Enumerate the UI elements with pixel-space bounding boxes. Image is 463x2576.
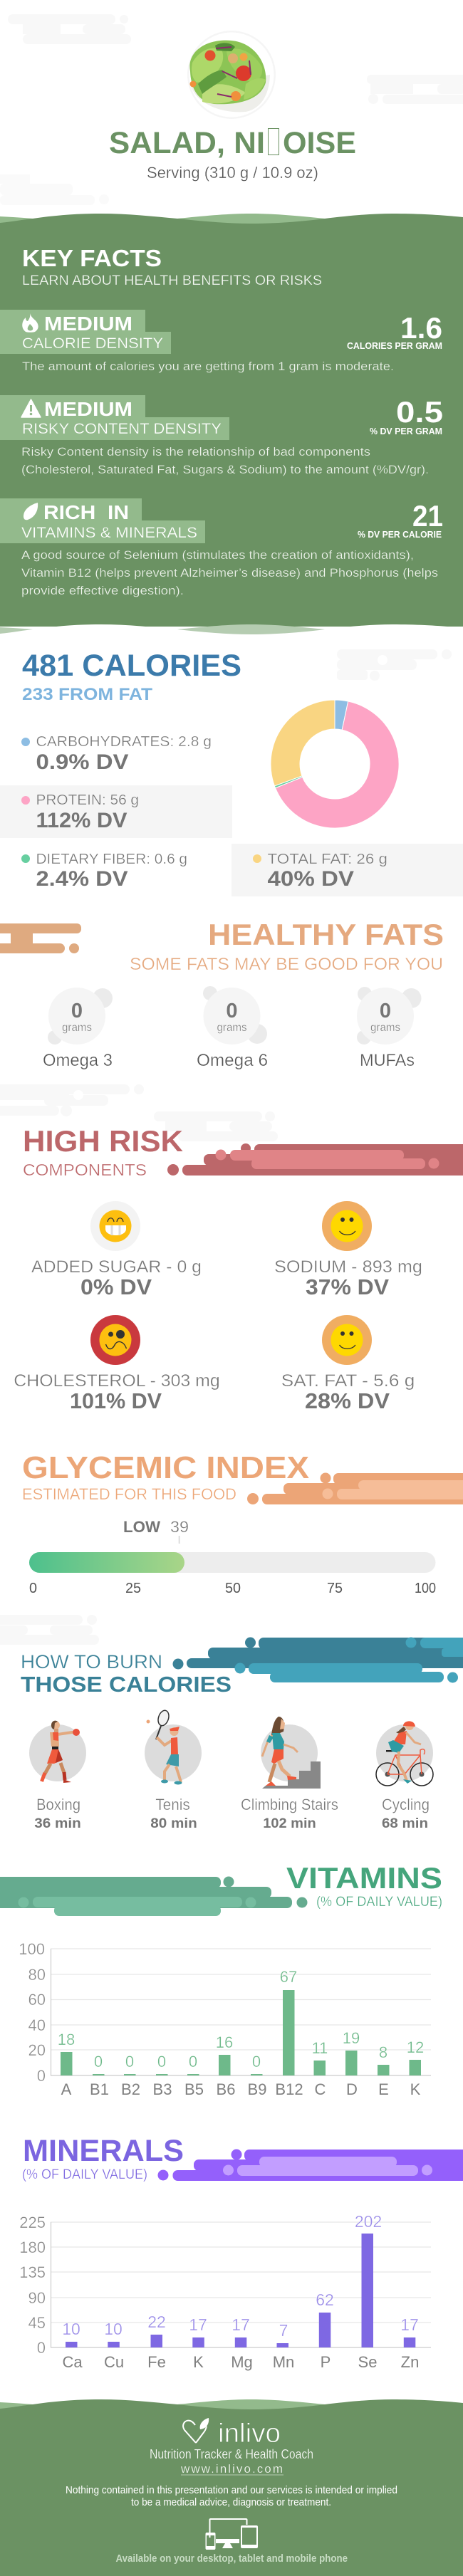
icon: flame bbox=[22, 313, 38, 333]
gauge scale: 0 bbox=[29, 1581, 37, 1596]
gauge value: LOW bbox=[123, 1518, 160, 1536]
panel: key facts bbox=[0, 214, 463, 641]
stat: protein: 112% DV bbox=[36, 809, 127, 832]
item: cholesterol: CHOLESTEROL - 303 mg bbox=[14, 1371, 220, 1391]
bar chart: vitamins: 12 bbox=[407, 2038, 424, 2056]
top wave bbox=[0, 214, 463, 627]
heading: MINERALS bbox=[23, 2134, 184, 2168]
stat: protein bbox=[0, 785, 232, 838]
heading: 233 FROM FAT bbox=[22, 685, 152, 704]
heading bbox=[22, 649, 241, 704]
bar chart: vitamins: 60 bbox=[28, 1991, 46, 2009]
background clouds bbox=[0, 1084, 278, 1141]
background cloud bbox=[337, 649, 452, 681]
bar chart: vitamins: B12 bbox=[275, 2080, 303, 2098]
panel: vitamins bbox=[0, 1861, 442, 2098]
fact: rich in vitamins and minerals: VITAMINS & MINERALS bbox=[21, 525, 197, 541]
fat: omega 6: Omega 6 bbox=[197, 1051, 268, 1070]
bar chart: vitamins: 100 bbox=[19, 1940, 45, 1958]
logo: inlivo bbox=[218, 2419, 281, 2449]
background clouds bbox=[0, 14, 463, 205]
fat: omega 3 bbox=[43, 988, 113, 1070]
heading: 481 CALORIES bbox=[22, 649, 241, 683]
stat: dietary fiber: 2.4% DV bbox=[36, 867, 128, 891]
bar chart: vitamins: B9 bbox=[248, 2080, 266, 2098]
decoration bbox=[247, 1472, 463, 1504]
disclaimer: Nothing contained in this presentation and our services is intended or implied bbox=[66, 2485, 397, 2496]
bar chart: minerals: 10 bbox=[62, 2320, 80, 2338]
item: added sugar bbox=[31, 1201, 202, 1299]
bar chart: minerals: 7 bbox=[279, 2321, 288, 2340]
bar chart: minerals: 17 bbox=[400, 2315, 419, 2334]
fat: omega 6: 0 bbox=[226, 1000, 238, 1022]
fact: rich in vitamins and minerals: 21 bbox=[412, 499, 443, 533]
title: SALAD, NI bbox=[109, 126, 265, 160]
gauge scale: 75 bbox=[327, 1581, 343, 1596]
heading: ESTIMATED FOR THIS FOOD bbox=[22, 1485, 236, 1503]
bar chart: vitamins: 0 bbox=[157, 2053, 166, 2070]
fact: calorie density: CALORIES PER GRAM bbox=[347, 341, 442, 351]
activity: cycling bbox=[376, 1721, 433, 1831]
bar chart: vitamins: 8 bbox=[379, 2043, 387, 2061]
bar chart: vitamins: 0 bbox=[252, 2053, 261, 2070]
item: sodium: 37% DV bbox=[306, 1274, 389, 1299]
bar chart: vitamins: B2 bbox=[121, 2080, 140, 2098]
bar chart: vitamins: B1 bbox=[90, 2080, 109, 2098]
fat: omega 3: 0 bbox=[71, 1000, 83, 1022]
icon: leaf bbox=[24, 503, 38, 520]
gauge value: 39 bbox=[170, 1518, 189, 1536]
heading: (% OF DAILY VALUE) bbox=[316, 1895, 442, 1910]
decoration bbox=[167, 1143, 463, 1176]
fact: risky content density: Risky Content density is the relationship of bad components bbox=[21, 445, 370, 459]
fact: calorie density: MEDIUM bbox=[44, 313, 132, 335]
bar chart: vitamins: 80 bbox=[28, 1966, 46, 1984]
gauge scale: 50 bbox=[225, 1581, 241, 1596]
bar chart: vitamins: 16 bbox=[216, 2033, 233, 2051]
activity: climbing stairs: 102 min bbox=[263, 1816, 316, 1831]
fact: risky content density: 0.5 bbox=[396, 395, 443, 429]
fat: MUFAs: grams bbox=[370, 1022, 400, 1034]
item: saturated fat bbox=[281, 1315, 415, 1413]
activity: boxing bbox=[29, 1721, 86, 1831]
decoration bbox=[0, 923, 81, 953]
panel: footer bbox=[0, 2399, 463, 2576]
disclaimer bbox=[66, 2485, 397, 2508]
stat: total fat: 40% DV bbox=[268, 867, 354, 891]
fact: calorie density: 1.6 bbox=[400, 311, 442, 345]
item: cholesterol: 101% DV bbox=[70, 1388, 162, 1413]
bar chart: vitamins: 18 bbox=[58, 2031, 75, 2048]
heading: SOME FATS MAY BE GOOD FOR YOU bbox=[130, 955, 443, 974]
activity: boxing: Boxing bbox=[36, 1796, 80, 1813]
heading: KEY FACTS bbox=[22, 245, 162, 271]
fact: calorie density: CALORIE DENSITY bbox=[22, 335, 163, 352]
gauge scale: 100 bbox=[415, 1581, 436, 1596]
panel: minerals bbox=[19, 2134, 463, 2371]
bar chart: vitamins: 67 bbox=[280, 1968, 297, 1986]
bar chart: vitamins: B6 bbox=[217, 2080, 235, 2098]
fat: omega 6 bbox=[197, 986, 268, 1070]
bar chart: minerals bbox=[19, 2212, 431, 2371]
icon: tennis player bbox=[147, 1709, 182, 1784]
bar chart: minerals: 180 bbox=[19, 2239, 46, 2256]
heading: LEARN ABOUT HEALTH BENEFITS OR RISKS bbox=[22, 273, 322, 288]
item: cholesterol bbox=[14, 1315, 220, 1413]
heading: THOSE CALORIES bbox=[21, 1672, 232, 1697]
panel: healthy fats bbox=[0, 918, 444, 1070]
bar chart: minerals: Fe bbox=[147, 2353, 166, 2371]
fact: rich in vitamins and minerals: RICH IN bbox=[43, 501, 129, 523]
heading: VITAMINS bbox=[286, 1861, 442, 1895]
bar chart: vitamins bbox=[19, 1940, 431, 2098]
item: added sugar: 0% DV bbox=[80, 1274, 152, 1299]
heading bbox=[130, 918, 444, 974]
decoration bbox=[172, 1638, 463, 1683]
bar chart: minerals: P bbox=[321, 2353, 331, 2371]
icon: salad bowl bbox=[187, 31, 276, 119]
disclaimer: to be a medical advice, diagnosis or treatment. bbox=[131, 2497, 331, 2508]
bar chart: minerals: 45 bbox=[28, 2314, 46, 2332]
bar chart: minerals: Cu bbox=[104, 2353, 124, 2371]
bar chart: minerals: 17 bbox=[189, 2315, 207, 2334]
item: saturated fat: 28% DV bbox=[305, 1388, 390, 1413]
bar chart: minerals: 17 bbox=[232, 2315, 250, 2334]
bar chart: vitamins: B3 bbox=[153, 2080, 172, 2098]
heading: HOW TO BURN bbox=[21, 1651, 162, 1672]
stat: carbohydrates: CARBOHYDRATES: 2.8 g bbox=[36, 734, 212, 750]
panel: calories bbox=[0, 649, 463, 896]
bar chart: vitamins: 0 bbox=[189, 2053, 197, 2070]
bar chart: minerals: K bbox=[193, 2353, 204, 2371]
bar chart: vitamins: 40 bbox=[28, 2016, 46, 2034]
activity: climbing stairs bbox=[241, 1717, 338, 1831]
bar chart: minerals: Zn bbox=[401, 2353, 419, 2371]
stat: carbohydrates: 0.9% DV bbox=[36, 750, 128, 774]
footer wave bbox=[0, 2399, 463, 2576]
fat: omega 6: grams bbox=[217, 1022, 246, 1034]
donut chart bbox=[271, 700, 399, 828]
tagline: Nutrition Tracker & Health Coach bbox=[150, 2447, 313, 2461]
heading bbox=[21, 1651, 232, 1697]
fact: rich in vitamins and minerals: A good source of Selenium (stimulates the creation of antioxidants), bbox=[21, 548, 414, 562]
item: sodium: SODIUM - 893 mg bbox=[274, 1257, 422, 1277]
fact: rich in vitamins and minerals: provide effective digestion). bbox=[21, 584, 184, 597]
bar chart: vitamins: A bbox=[61, 2080, 72, 2098]
fact: risky content density: % DV PER GRAM bbox=[370, 426, 442, 436]
gauge scale: 25 bbox=[125, 1581, 141, 1596]
bar chart: minerals: 10 bbox=[104, 2320, 123, 2338]
bar chart: minerals: Se bbox=[358, 2353, 377, 2371]
bar chart: vitamins: 19 bbox=[343, 2029, 360, 2047]
stat: total fat: TOTAL FAT: 26 g bbox=[268, 852, 387, 867]
gauge scale bbox=[29, 1581, 436, 1596]
icon: boxer bbox=[41, 1721, 80, 1783]
fat: omega 3: grams bbox=[62, 1022, 92, 1034]
bar chart: minerals: 135 bbox=[19, 2263, 46, 2281]
heading bbox=[22, 2134, 184, 2182]
stat: protein: PROTEIN: 56 g bbox=[36, 792, 139, 808]
bottom wave bbox=[0, 624, 463, 641]
fat: MUFAs bbox=[357, 987, 422, 1070]
heading: HIGH RISK bbox=[23, 1124, 183, 1158]
bar chart: minerals: 90 bbox=[28, 2289, 46, 2307]
stat: total fat bbox=[232, 844, 463, 896]
heading: HEALTHY FATS bbox=[208, 918, 444, 951]
heading: (% OF DAILY VALUE) bbox=[22, 2167, 147, 2182]
bar chart: vitamins: E bbox=[378, 2080, 389, 2098]
bar chart: minerals: 22 bbox=[147, 2313, 166, 2331]
icon: devices bbox=[205, 2518, 258, 2550]
icon: stairs climber bbox=[262, 1717, 321, 1789]
panel: burn calories bbox=[0, 1615, 463, 1831]
heading bbox=[22, 245, 322, 288]
decoration bbox=[0, 1877, 308, 1916]
bar chart: vitamins: C bbox=[315, 2080, 326, 2098]
bar chart: minerals: Ca bbox=[62, 2353, 83, 2371]
icon: warning triangle bbox=[21, 399, 41, 417]
panel: high risk bbox=[0, 1084, 463, 1413]
heading: COMPONENTS bbox=[23, 1161, 147, 1179]
heading bbox=[286, 1861, 442, 1910]
logo bbox=[183, 2418, 281, 2449]
fact: rich in vitamins and minerals: % DV PER CALORIE bbox=[358, 530, 442, 540]
icon: smiling face bbox=[331, 1324, 363, 1356]
gauge bar bbox=[29, 1552, 436, 1573]
icon: grinning face bbox=[100, 1210, 131, 1242]
bar chart: vitamins: 11 bbox=[312, 2039, 328, 2057]
fact: risky content density: (Cholesterol, Saturated Fat, Sugars & Sodium) to the amount (%DV/gr). bbox=[21, 463, 429, 476]
activity: tennis: Tenis bbox=[155, 1796, 190, 1813]
fact: rich in vitamins and minerals: Vitamin B12 (helps prevent Alzheimer’s disease) and Phosphorus (helps bbox=[21, 566, 438, 580]
header section bbox=[0, 14, 463, 205]
stat: dietary fiber: DIETARY FIBER: 0.6 g bbox=[36, 852, 187, 867]
bar chart: vitamins: 0 bbox=[37, 2067, 46, 2085]
activity: cycling: Cycling bbox=[382, 1796, 430, 1813]
title: OISE bbox=[283, 126, 356, 160]
activity: cycling: 68 min bbox=[382, 1816, 428, 1831]
heading bbox=[23, 1124, 183, 1179]
title bbox=[109, 126, 356, 160]
bar chart: minerals: 62 bbox=[316, 2290, 334, 2309]
fat: MUFAs: 0 bbox=[380, 1000, 391, 1022]
bar chart: minerals: Mg bbox=[231, 2353, 253, 2371]
panel: glycemic index bbox=[22, 1450, 463, 1596]
item: sodium bbox=[274, 1201, 422, 1299]
bar chart: vitamins: K bbox=[410, 2080, 421, 2098]
item: added sugar: ADDED SUGAR - 0 g bbox=[31, 1257, 202, 1277]
heading: GLYCEMIC INDEX bbox=[22, 1450, 309, 1485]
stat: carbohydrates bbox=[21, 734, 212, 774]
icon: worried face bbox=[100, 1324, 131, 1356]
bar chart: minerals: Mn bbox=[273, 2353, 294, 2371]
fact: risky content density bbox=[0, 395, 443, 476]
icon: smiling face bbox=[331, 1210, 363, 1242]
serving size: Serving (310 g / 10.9 oz) bbox=[147, 164, 318, 182]
bar chart: vitamins: B5 bbox=[184, 2080, 204, 2098]
fact: risky content density: MEDIUM bbox=[44, 398, 132, 420]
fact: risky content density: RISKY CONTENT DENSITY bbox=[22, 421, 222, 437]
icon: cyclist bbox=[376, 1721, 433, 1786]
availability note: Available on your desktop, tablet and mobile phone bbox=[115, 2553, 348, 2565]
bar chart: minerals: 0 bbox=[37, 2339, 46, 2357]
activity: climbing stairs: Climbing Stairs bbox=[241, 1796, 338, 1813]
gauge value bbox=[123, 1518, 189, 1544]
activity: tennis: 80 min bbox=[150, 1816, 197, 1831]
fact: calorie density: The amount of calories you are getting from 1 gram is moderate. bbox=[22, 360, 394, 373]
decoration bbox=[158, 2149, 463, 2181]
bar chart: vitamins: 0 bbox=[125, 2053, 134, 2070]
bar chart: vitamins: 0 bbox=[94, 2053, 103, 2070]
activity: tennis bbox=[145, 1709, 202, 1831]
fact: rich in vitamins and minerals bbox=[0, 498, 443, 597]
activity: boxing: 36 min bbox=[34, 1816, 81, 1831]
fat: MUFAs: MUFAs bbox=[360, 1051, 415, 1070]
bar chart: vitamins: D bbox=[346, 2080, 358, 2098]
stat: dietary fiber bbox=[21, 852, 187, 891]
bar chart: minerals: 202 bbox=[355, 2212, 382, 2231]
background cloud bbox=[0, 1615, 99, 1645]
website link: www.inlivo.com bbox=[180, 2462, 283, 2476]
heading bbox=[22, 1450, 309, 1503]
bar chart: minerals: 225 bbox=[19, 2214, 46, 2231]
bar chart: vitamins: 20 bbox=[28, 2041, 46, 2059]
fact: calorie density bbox=[0, 310, 442, 373]
item: saturated fat: SAT. FAT - 5.6 g bbox=[281, 1371, 415, 1391]
fat: omega 3: Omega 3 bbox=[43, 1051, 113, 1070]
